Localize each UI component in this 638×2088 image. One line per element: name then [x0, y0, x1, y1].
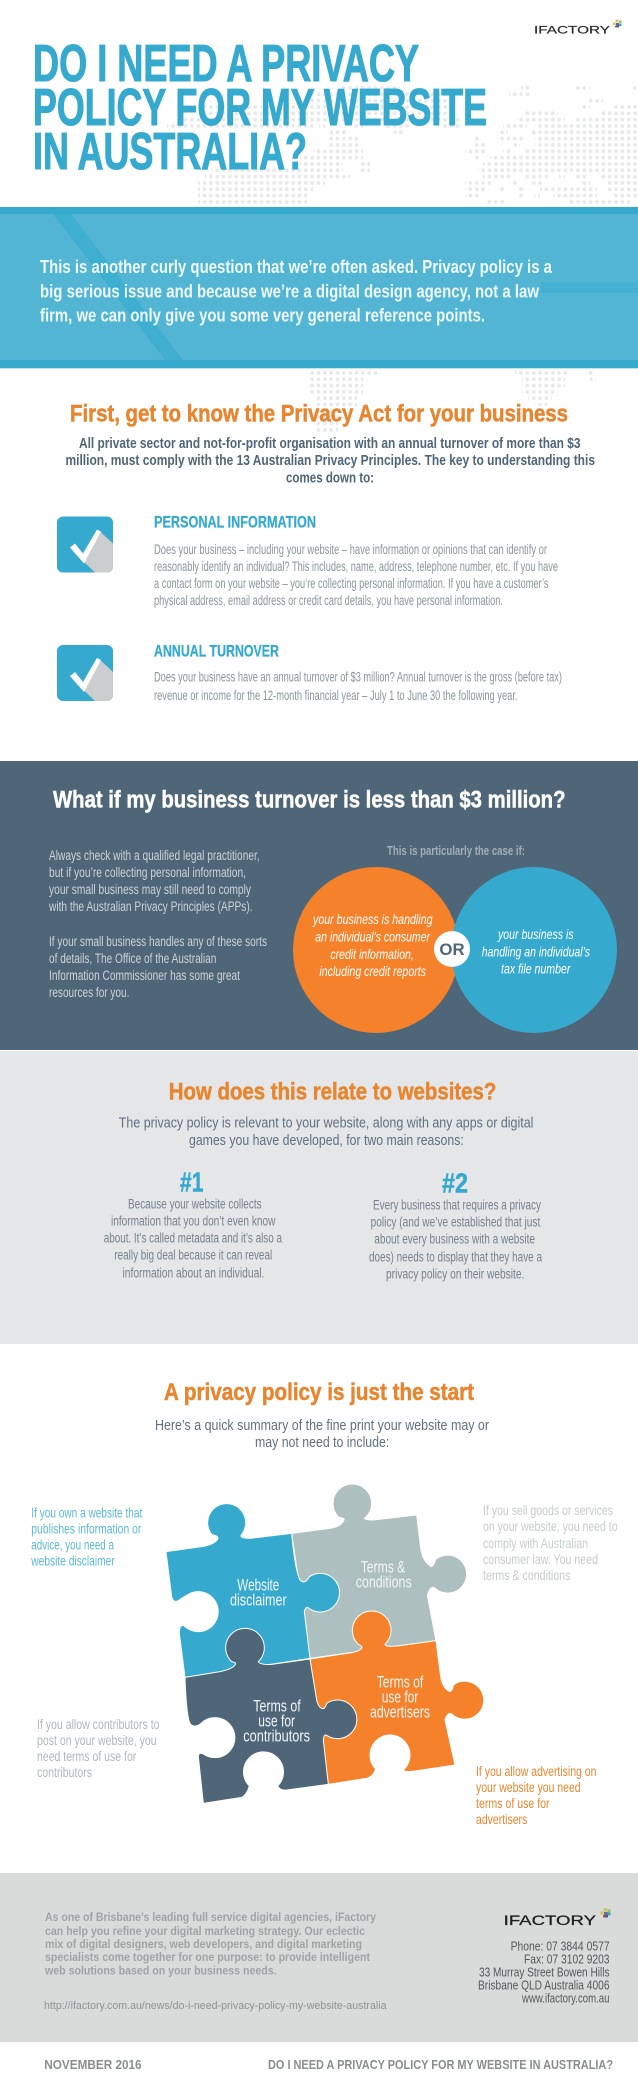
text: legal advice: resources for you.	[49, 985, 129, 1000]
panel: a privacy policy is just the start	[31, 1379, 618, 1827]
icon: check mark 1	[57, 516, 113, 572]
callout: advertisers: your website you need	[476, 1780, 581, 1795]
text: personal information	[154, 542, 558, 608]
text: legal advice: Information Commissioner has some great	[49, 968, 240, 983]
label: website disclaimer	[230, 1577, 287, 1610]
background: dotted world map	[167, 85, 638, 452]
text: about iFactory: can help you refine your digital marketing strategy. Our eclectic	[45, 1926, 366, 1938]
panel: footer contact	[0, 1873, 638, 2042]
badge: OR: OR	[439, 940, 465, 959]
reason 2: privacy policy on their website.	[386, 1267, 524, 1282]
text: about iFactory: web solutions based on your business needs.	[44, 1966, 277, 1978]
text: annual turnover	[154, 670, 562, 703]
label: case if: This is particularly the case if:	[387, 843, 525, 858]
intro text: This is another curly question that we’re often asked. Privacy policy is a	[40, 257, 553, 277]
callout: terms and conditions: comply with Australian	[483, 1536, 588, 1551]
logo: iFactory header: IFACTORY	[534, 25, 611, 37]
label: website disclaimer: disclaimer	[230, 1592, 287, 1610]
reason 1: Because your website collects	[128, 1196, 262, 1211]
circle: tax file number: tax file number	[501, 961, 571, 977]
callout: contributors: need terms of use for	[37, 1749, 137, 1764]
text: relevance	[119, 1115, 533, 1149]
puzzle piece: website disclaimer	[166, 1504, 340, 1677]
reason 1: really big deal because it can reveal	[114, 1248, 272, 1263]
callout: website disclaimer: website disclaimer	[31, 1554, 115, 1569]
text: relevance: games you have developed, for two main reasons:	[189, 1132, 464, 1149]
circle: tax file number	[451, 867, 617, 1033]
icon: check mark 2	[57, 645, 113, 701]
panel: how does this relate to websites	[0, 1051, 638, 1344]
callout: website disclaimer: If you own a website that	[31, 1506, 142, 1521]
puzzle piece: terms for contributors	[185, 1628, 357, 1803]
text: legal advice: with the Australian Privacy Principles (APPs).	[48, 899, 253, 914]
callout: terms and conditions	[483, 1503, 618, 1583]
callout: advertisers	[476, 1764, 596, 1827]
callout: website disclaimer	[31, 1506, 142, 1569]
title	[33, 35, 487, 181]
callout: advertisers: If you allow advertising on	[476, 1764, 596, 1779]
label: website disclaimer: Website	[237, 1577, 279, 1595]
callout: advertisers: advertisers	[476, 1812, 527, 1827]
text: contact details: www.ifactory.com.au	[521, 1991, 610, 2005]
puzzle graphic	[166, 1484, 484, 1803]
reason 2: about every business with a website	[374, 1232, 535, 1247]
reason 2: policy (and we’ve established that just	[371, 1215, 540, 1230]
text: summary: Here’s a quick summary of the fine print your website may or	[155, 1417, 489, 1434]
text: contact details: Phone: 07 3844 0577	[511, 1940, 610, 1954]
text: summary	[155, 1417, 489, 1451]
circle: consumer credit	[293, 867, 459, 1033]
text: about iFactory: As one of Brisbane’s leading full service digital agencies, iFactory	[45, 1912, 377, 1924]
text: legal advice: If your small business handles any of these sorts	[49, 934, 267, 949]
intro text: big serious issue and because we’re a digital design agency, not a law	[40, 281, 540, 301]
panel: Privacy Act section	[57, 401, 595, 703]
subheading text: comes down to:	[286, 471, 374, 487]
label: terms for contributors	[243, 1698, 310, 1746]
heading: personal information: PERSONAL INFORMATION	[154, 513, 316, 532]
label: terms for contributors: contributors	[243, 1728, 310, 1746]
reason 1	[104, 1167, 282, 1280]
badge: OR	[434, 931, 470, 967]
callout: advertisers: terms of use for	[476, 1796, 550, 1811]
reason 2: #2	[442, 1168, 468, 1199]
reason 1: information about an individual.	[122, 1265, 264, 1280]
heading: websites: How does this relate to websites?	[169, 1078, 496, 1105]
text: about iFactory	[44, 1912, 377, 1978]
circle: consumer credit: your business is handling	[312, 911, 433, 927]
circle: consumer credit: an individual’s consumer	[315, 929, 431, 945]
heading: annual turnover: ANNUAL TURNOVER	[154, 642, 279, 661]
puzzle piece: terms and conditions	[292, 1484, 467, 1658]
label: terms for contributors: Terms of	[253, 1698, 301, 1716]
text: contact details: 33 Murray Street Bowen Hills	[479, 1966, 610, 1980]
text: source url: http://ifactory.com.au/news/do-i-need-privacy-policy-my-website-australia	[44, 2000, 387, 2012]
text: summary: may not need to include:	[255, 1434, 389, 1451]
text: relevance: The privacy policy is relevant to your website, along with any apps or digital	[119, 1115, 533, 1132]
callout: contributors: If you allow contributors to	[37, 1717, 160, 1732]
intro text: firm, we can only give you some very general reference points.	[40, 306, 485, 326]
circle: consumer credit: credit information,	[330, 946, 414, 962]
intro text	[40, 257, 553, 326]
callout: contributors: contributors	[37, 1765, 92, 1780]
title: IN AUSTRALIA?	[33, 123, 307, 181]
reason 2: Every business that requires a privacy	[373, 1197, 541, 1212]
callout: website disclaimer: publishes information or	[31, 1522, 142, 1537]
callout: terms and conditions: terms & conditions	[483, 1568, 571, 1583]
label: terms for contributors: use for	[258, 1713, 295, 1731]
panel: intro band	[0, 207, 638, 369]
reason 1: information that you don’t even know	[111, 1214, 276, 1229]
logo: iFactory header	[534, 20, 622, 37]
circle: tax file number: your business is	[497, 926, 574, 942]
text: legal advice	[48, 848, 267, 1000]
circle: tax file number: handling an individual’s	[482, 944, 590, 960]
reason 2	[369, 1168, 542, 1282]
callout: terms and conditions: consumer law. You need	[483, 1552, 598, 1567]
logo: iFactory footer: IFACTORY	[504, 1912, 597, 1928]
subheading text	[66, 436, 595, 487]
reason 1: about. It’s called metadata and it’s also a	[104, 1231, 282, 1246]
text: legal advice: but if you’re collecting personal information,	[49, 865, 246, 880]
text: legal advice: Always check with a qualified legal practitioner,	[49, 848, 260, 863]
panel: turnover less than $3 million	[0, 761, 638, 1050]
label: terms and conditions	[356, 1559, 412, 1592]
reason 1: #1	[180, 1167, 203, 1198]
text: contact details	[478, 1940, 610, 2005]
label: terms for advertisers: use for	[382, 1689, 419, 1707]
heading: just the start: A privacy policy is just the start	[164, 1379, 474, 1406]
callout: contributors	[37, 1717, 160, 1780]
label: terms for advertisers: Terms of	[377, 1674, 424, 1692]
title: DO I NEED A PRIVACY	[33, 35, 419, 93]
circle: consumer credit: including credit reports	[319, 963, 426, 979]
label: terms and conditions: conditions	[356, 1574, 412, 1592]
text: contact details: Fax: 07 3102 9203	[524, 1953, 610, 1967]
text: contact details: Brisbane QLD Australia 4006	[478, 1979, 610, 1993]
callout: website disclaimer: advice, you need a	[31, 1538, 114, 1553]
label: terms for advertisers: advertisers	[370, 1704, 430, 1722]
text: legal advice: of details, The Office of the Australian	[49, 951, 216, 966]
label: terms and conditions: Terms &	[361, 1559, 405, 1577]
text: about iFactory: mix of digital designers, web developers, and digital marketing	[45, 1939, 362, 1951]
puzzle piece: terms for advertisers	[310, 1611, 484, 1784]
footer: date: NOVEMBER 2016	[44, 2057, 142, 2072]
reason 2: does) needs to display that they have a	[369, 1250, 542, 1265]
text: about iFactory: specialists come together for one purpose: to provide intelligent	[45, 1952, 370, 1964]
logo: iFactory footer	[504, 1908, 610, 1928]
callout: contributors: post on your website, you	[37, 1733, 157, 1748]
label: terms for advertisers	[370, 1674, 430, 1722]
text: legal advice: your small business may still need to comply	[49, 882, 251, 897]
